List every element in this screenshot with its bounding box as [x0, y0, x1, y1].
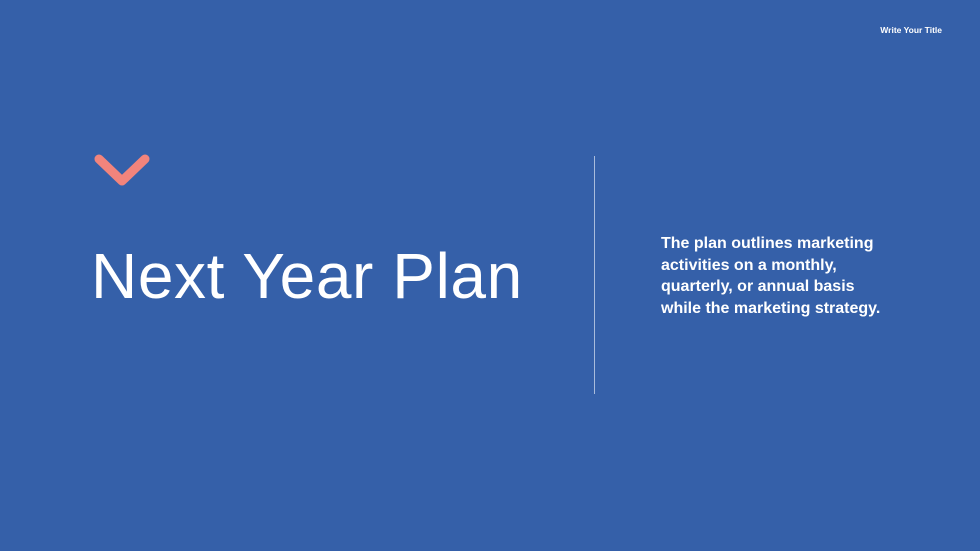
title: Next Year Plan	[91, 240, 523, 312]
description text: while the marketing strategy.	[661, 300, 880, 317]
description text: quarterly, or annual basis	[661, 278, 855, 295]
icon: chevron	[94, 154, 150, 186]
description text	[661, 235, 880, 317]
header label: Write Your Title	[880, 25, 942, 35]
divider line	[594, 156, 595, 394]
description text: activities on a monthly,	[661, 257, 837, 274]
description text: The plan outlines marketing	[661, 235, 873, 252]
